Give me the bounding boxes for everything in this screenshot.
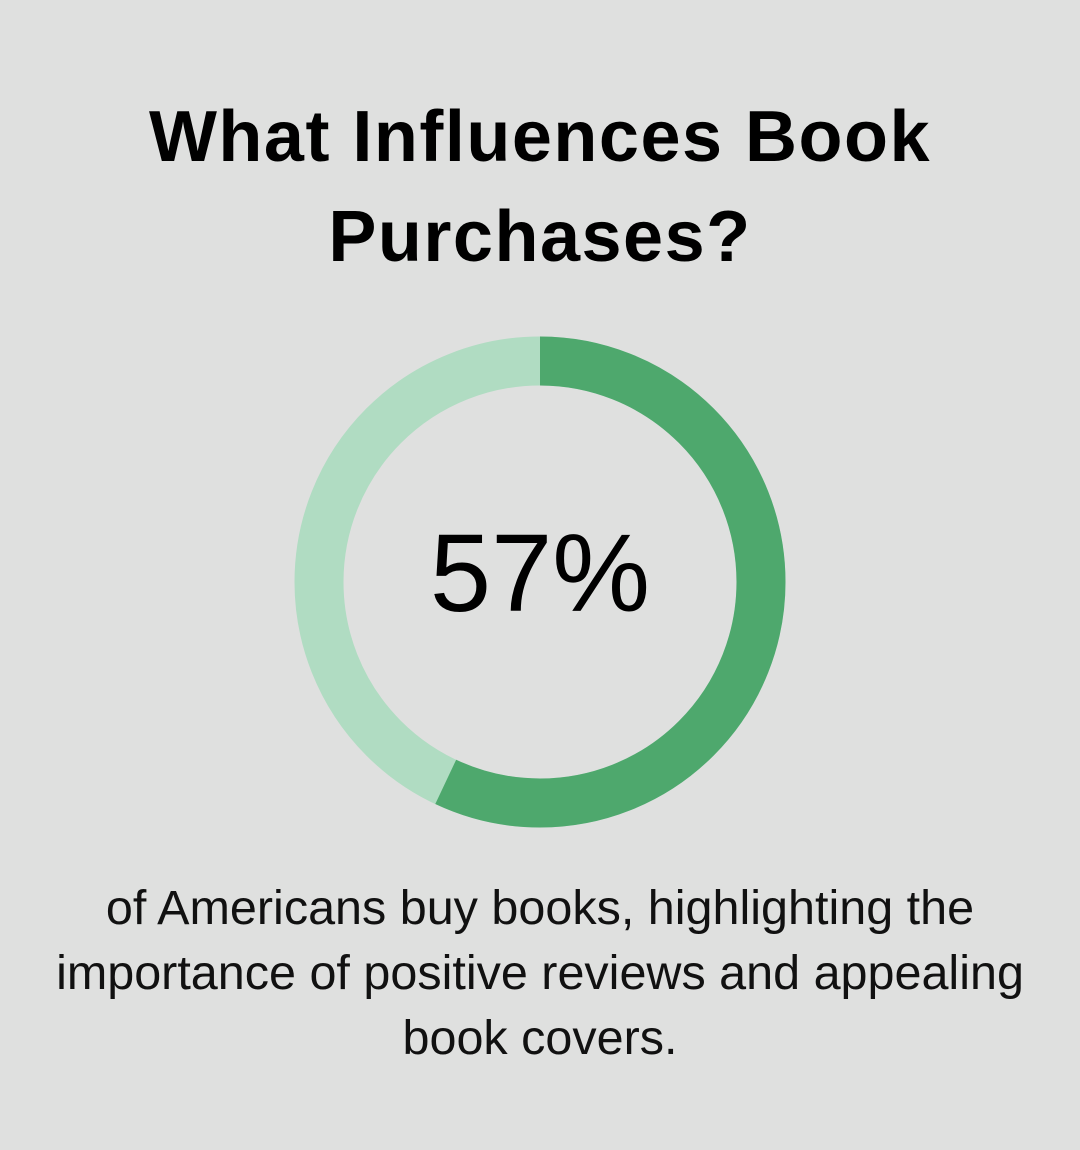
description text	[56, 881, 1024, 1065]
description text: importance of positive reviews and appealing	[56, 946, 1024, 1000]
donut 57% segment	[319, 361, 761, 803]
description text: of Americans buy books, highlighting the	[106, 881, 974, 935]
percentage value: 57%	[430, 512, 650, 635]
title	[149, 97, 931, 277]
title: What Influences Book	[149, 97, 931, 177]
description text: book covers.	[403, 1011, 677, 1065]
title: Purchases?	[328, 197, 752, 277]
donut remainder segment	[319, 361, 761, 803]
